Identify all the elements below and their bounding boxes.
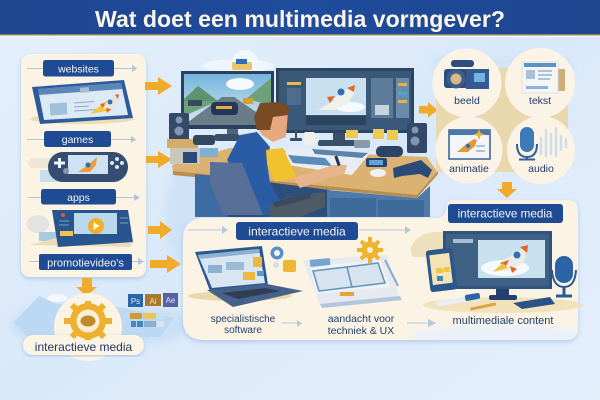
bottom-right cloud fade [412,322,578,340]
label: apps [41,189,116,204]
gamepads [376,146,403,157]
icon: Ps Ai Ae software badges: Ae [166,296,176,305]
yellow sleeve [266,148,297,182]
arrow: desk to media [419,102,438,118]
label: games: games [62,134,93,146]
icon: wireframe document [303,237,402,308]
caption: multimediale content: multimediale content [453,315,553,327]
label: promotievideo's: promotievideo's [47,258,124,270]
panel: output types [21,54,146,277]
icon: gear [64,301,112,340]
circle: animatie: animatie [449,163,489,175]
title: Wat doet een multimedia vormgever? [95,6,505,32]
icon: app tablet [27,210,133,247]
title banner [0,0,600,37]
circle: tekst [505,48,575,118]
pen, pencil, phone [436,294,480,307]
icon: video camera [444,60,489,89]
caption: specialistische software: specialistische [211,314,276,325]
icon: game console [28,152,128,182]
arrow: apps to panel [148,221,172,239]
mug [304,132,315,146]
decorative soft background clouds [10,56,572,345]
desk clutter [193,135,215,145]
arrow: websites to desk [145,77,172,95]
icon: small gear and chat [270,246,296,272]
label: interactieve media centre [236,222,358,240]
hair [254,102,290,130]
label: interactieve media [23,335,144,355]
icon: laptop [188,246,303,307]
arrow: media to interactive media [497,182,517,198]
right speaker [407,123,427,153]
panel: interactieve media workflow [183,200,590,348]
caption: specialistische software: software [224,325,262,336]
icon: website tablet [30,80,134,124]
caption: aandacht voor techniek & UX: techniek & UX [328,325,394,337]
icon: gold gear [357,237,383,263]
designer body [227,132,287,215]
arrow: promotievideo's to panel [150,255,181,273]
icon: animation window [449,129,490,159]
arm [293,165,347,188]
panel: media building blocks [432,48,575,184]
face [257,110,288,142]
icon: microphone and waveform [517,127,566,160]
tablet [426,247,457,292]
right monitor [276,68,414,148]
arrow: games to desk [146,151,172,168]
label: apps: apps [67,192,90,204]
icon: yellow folder [232,62,252,70]
label: interactieve media right: interactieve media [458,208,553,220]
label: interactieve media right [448,204,563,223]
arrow lines beside labels [27,65,144,265]
label: interactieve media centre: interactieve media [248,224,346,238]
circle: audio: audio [528,163,554,175]
illustration: interactive media gear [14,293,174,361]
icon: Ps Ai Ae software badges: Ai [149,297,157,306]
microphone [555,256,573,283]
circle: beeld: beeld [454,95,480,107]
illustration: interactive media gear: interactieve media [35,340,133,354]
label: games [44,131,111,147]
label: websites [43,60,114,76]
label: promotievideo's [39,254,132,270]
circle: tekst: tekst [529,95,551,107]
icon: document [522,62,565,93]
circle: beeld [432,48,502,118]
icon: Ps Ai Ae software badges: Ps [131,297,140,306]
circle: animatie [436,116,502,184]
flow arrows [188,226,436,327]
desk [172,148,438,197]
arrow: down to gear [76,278,97,296]
trousers [270,192,325,217]
icon: workstation with rocket monitor [410,231,583,313]
left monitor [181,71,274,135]
circle: audio [507,116,575,184]
icon: Ps Ai Ae software badges [128,293,178,327]
label: websites: websites [57,64,99,76]
left speaker [169,113,189,141]
illustration: designer at desk [167,50,438,217]
chair [210,162,263,215]
caption: aandacht voor techniek & UX: aandacht voor [328,313,395,325]
sticky notes [346,130,358,138]
drawing tablet [285,147,370,175]
